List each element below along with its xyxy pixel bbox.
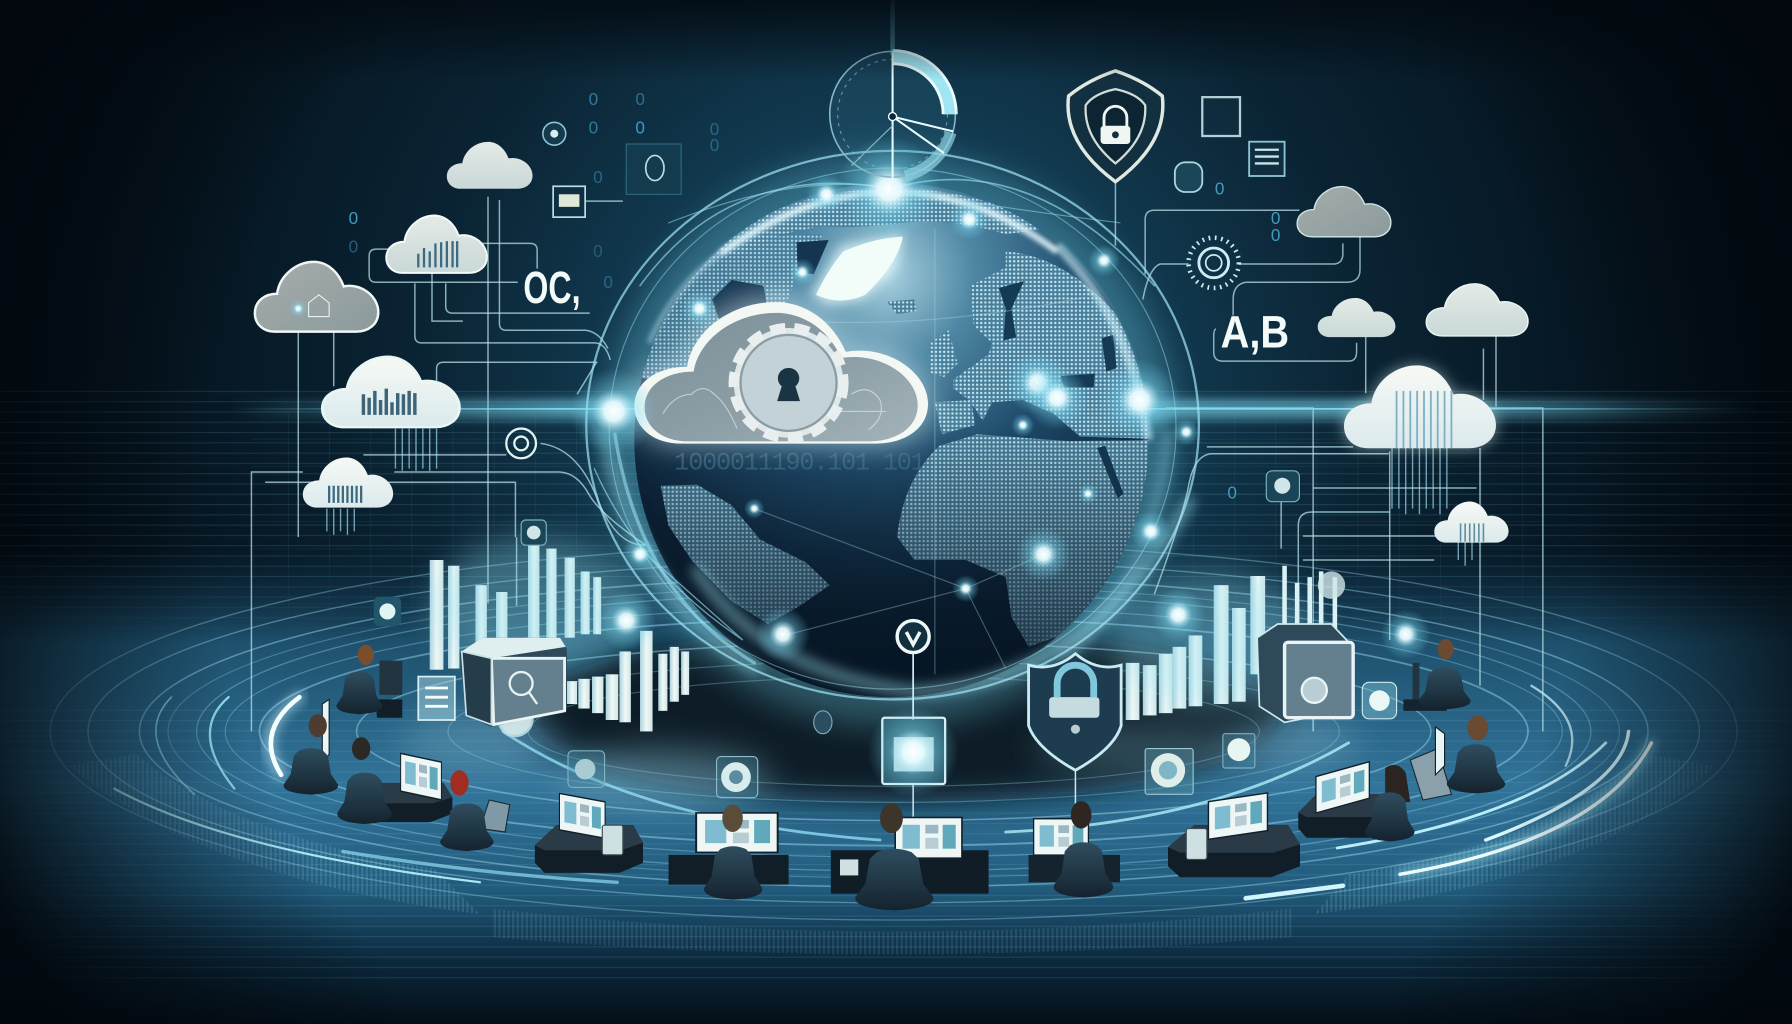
icon: frame — [1202, 97, 1240, 136]
laptop station right — [1168, 792, 1300, 877]
shield lock — [1104, 106, 1127, 128]
icon: light bulb — [626, 144, 681, 194]
bright top rim — [720, 192, 1057, 254]
icon: small lock on platform — [814, 711, 832, 734]
arctic band — [714, 189, 1046, 257]
cloud glow — [631, 294, 930, 445]
floor texture — [0, 709, 1792, 983]
icon: glow badge left — [498, 702, 533, 736]
binary data columns: 0 — [589, 118, 598, 138]
north america — [640, 234, 823, 389]
person left with laptop — [337, 737, 452, 824]
baltic sea — [999, 281, 1024, 341]
left safe — [459, 638, 567, 727]
cloud medium — [1426, 284, 1528, 336]
small barcode cloud — [1434, 502, 1509, 543]
binary data columns: 0 — [1271, 225, 1280, 245]
padlock shield pin — [1068, 71, 1163, 182]
shield stem — [1074, 770, 1076, 814]
gauge dial — [830, 0, 955, 194]
icon: dial badge left — [717, 757, 758, 798]
dark reflective platform under globe — [526, 625, 1280, 803]
globe sphere — [634, 183, 1149, 697]
concentric floor rings — [50, 543, 1737, 920]
gauge needle — [893, 51, 953, 194]
icon: chip — [1175, 162, 1202, 192]
shield with open padlock — [1029, 654, 1121, 770]
lower-left chart bars — [567, 631, 689, 731]
binary data columns: 0 — [1215, 178, 1224, 198]
keyhole — [777, 368, 800, 401]
laptop station left — [535, 793, 643, 873]
large grey cloud — [255, 262, 378, 332]
floor — [0, 549, 1792, 1024]
binary data columns: 0 — [710, 135, 719, 155]
binary data columns: 0 — [1227, 482, 1237, 502]
red sea — [1097, 446, 1123, 498]
icon: document — [1249, 142, 1285, 176]
person at center right — [1029, 801, 1120, 898]
large bright cloud — [1344, 365, 1496, 448]
cloud small — [1318, 298, 1395, 337]
binary data columns: 0 — [710, 119, 719, 139]
icon: gauge badge right — [1145, 749, 1193, 794]
satellite clouds right — [1297, 187, 1528, 543]
label A, B: A,B — [1221, 306, 1289, 357]
africa and middle east — [897, 434, 1149, 647]
greenland — [816, 237, 903, 301]
right chart bars — [1126, 576, 1265, 720]
icon: round badge right — [1362, 682, 1397, 719]
bright glowing ring arcs — [114, 686, 1651, 898]
globe — [606, 154, 1177, 726]
binary data columns: 0 — [593, 167, 603, 187]
cloud small barcode — [303, 457, 393, 508]
binary data columns: 0 — [635, 89, 645, 109]
cloud with barcode — [386, 216, 487, 273]
lower ocean shade — [634, 423, 1149, 697]
gauge arc — [893, 57, 950, 114]
icon: node left — [521, 520, 546, 545]
right safe — [1257, 566, 1353, 722]
binary data columns: 0 — [349, 208, 358, 228]
british isles — [930, 330, 958, 377]
person upper right — [1403, 639, 1471, 711]
binary text on globe: 1000011190.101 101 — [674, 449, 926, 478]
icon: glow right — [1381, 609, 1431, 659]
icon: screen — [553, 186, 585, 217]
person with red hair — [440, 770, 510, 851]
left circuit lines — [251, 197, 646, 731]
icon: node left high — [374, 597, 401, 626]
icon: sun target — [1189, 238, 1239, 288]
pin in safe — [1318, 571, 1345, 599]
icon: pin badge right — [1223, 734, 1255, 768]
meridian grid — [731, 229, 1086, 674]
black sea — [1061, 374, 1095, 387]
person at center — [831, 803, 989, 910]
greenland glow — [810, 233, 904, 306]
people working at laptops — [284, 639, 1505, 910]
binary data columns: 0 — [635, 118, 645, 138]
horizontal light beam — [229, 399, 1760, 419]
icon: dial badge lower left — [568, 751, 605, 787]
right circuit lines — [1115, 182, 1543, 731]
satellite clouds left — [255, 142, 533, 508]
cloud face — [645, 313, 918, 441]
binary data columns: 0 — [1271, 208, 1280, 228]
caspian sea — [1102, 335, 1117, 371]
iberia — [935, 400, 975, 434]
cloud top — [447, 142, 533, 189]
glass orbit shell — [586, 151, 1199, 699]
gauge vertical glow — [890, 0, 895, 55]
tubes in safe — [1285, 566, 1335, 634]
icon: spiral — [506, 429, 536, 458]
floating small icons — [374, 97, 1431, 798]
person at center left — [669, 805, 789, 900]
barcode rain under right cloud — [327, 429, 1472, 566]
cloud grey top — [1297, 187, 1391, 237]
person top left — [336, 645, 402, 718]
binary data columns: 0 — [589, 89, 598, 109]
globe halo — [606, 154, 1177, 726]
cloud sketch lines — [663, 389, 886, 430]
icon: lens — [543, 122, 566, 145]
person far right — [1410, 715, 1505, 800]
icon: node right — [1266, 471, 1299, 502]
grid texture behind the network — [0, 389, 1792, 731]
south america — [661, 485, 830, 624]
icon: chart panel left — [418, 677, 455, 720]
icon: check badge — [897, 621, 929, 720]
eurasia — [953, 251, 1154, 439]
binary data columns: 0 — [603, 272, 613, 292]
central cloud security emblem — [631, 294, 930, 445]
glowing document panel — [867, 706, 959, 818]
hudson bay — [712, 280, 768, 322]
iceland — [887, 299, 917, 314]
arctic strait — [797, 240, 829, 274]
person right with laptop — [1298, 761, 1415, 841]
grid panels left and right — [251, 411, 1543, 697]
continents — [634, 189, 1154, 697]
binary data columns — [349, 89, 1280, 502]
upper-left chart bars — [430, 539, 601, 670]
binary data columns: 0 — [593, 241, 603, 261]
cloud with skyline — [322, 357, 459, 427]
person left with upright screen — [284, 699, 338, 795]
chart glow — [434, 537, 1314, 709]
gear — [734, 328, 843, 438]
label OC: OC, — [523, 262, 581, 313]
binary data columns: 0 — [349, 237, 358, 257]
magnifier — [510, 672, 537, 704]
cloud rim — [634, 302, 928, 444]
wet floor reflections — [400, 713, 1360, 807]
network nodes — [570, 136, 1206, 662]
